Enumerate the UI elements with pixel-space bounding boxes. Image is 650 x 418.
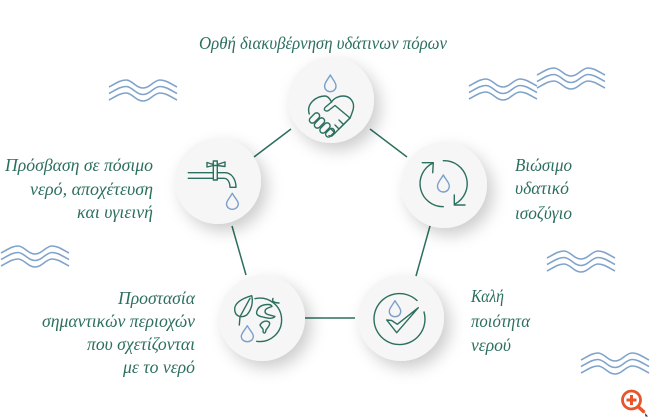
circle: top: [288, 57, 374, 143]
text: bottom left label: [42, 288, 196, 377]
icon: magnifier zoom button: [622, 391, 648, 416]
text: bottom left label: που σχετίζονται: [87, 334, 195, 354]
text: bottom right label: [470, 286, 531, 355]
text: left label: και υγιεινή: [77, 202, 153, 222]
pentagon connecting lines: [232, 129, 430, 318]
title: Ορθή διακυβέρνηση υδάτινων πόρων: [199, 33, 447, 53]
icon: circular arrows with drop: [420, 161, 467, 207]
circle: bottom right: [358, 275, 444, 361]
wave: middle right: [547, 251, 615, 272]
text: left label: Πρόσβαση σε πόσιμο: [4, 155, 153, 175]
text: right label: [515, 155, 572, 223]
text: left label: νερό, αποχέτευση: [30, 179, 153, 199]
icon: water tap with drop: [188, 161, 238, 209]
wave: upper right first: [469, 79, 537, 100]
icon: handshake heart with drop: [308, 75, 354, 138]
text: bottom right label: Καλή: [470, 286, 504, 306]
icon: globe with leaf and drop: [235, 296, 282, 342]
text: right label: ισοζύγιο: [515, 203, 572, 223]
text: left label: [4, 155, 153, 222]
text: bottom right label: ποιότητα: [471, 311, 531, 331]
text: bottom left label: σημαντικών περιοχών: [42, 311, 195, 331]
text: right label: υδατικό: [515, 178, 569, 198]
text: bottom right label: νερού: [471, 335, 511, 355]
text: bottom left label: Προστασία: [117, 288, 196, 308]
text: bottom left label: με το νερό: [122, 357, 195, 377]
text: right label: Βιώσιμο: [515, 155, 572, 175]
wave: middle left: [1, 246, 69, 267]
circle: bottom left: [219, 275, 305, 361]
circle: right: [401, 142, 487, 228]
circle: left: [175, 138, 261, 224]
wave: lower right: [581, 353, 649, 374]
icon: check mark in circle with drop: [374, 294, 425, 345]
wave: upper right second: [537, 68, 605, 89]
wave: upper left: [109, 80, 177, 101]
